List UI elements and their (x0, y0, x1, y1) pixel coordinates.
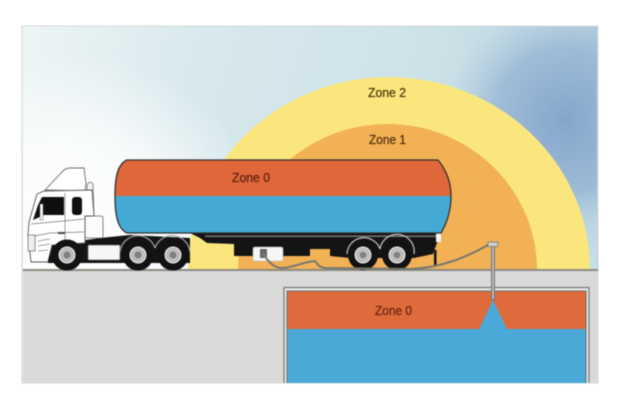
tanker: cylindrical tank (115, 160, 451, 233)
ground with surface line (23, 269, 598, 383)
vapour cone (479, 300, 507, 329)
pump unit (253, 247, 283, 261)
tractor wheels (48, 236, 190, 270)
trailer chassis (190, 232, 441, 266)
label: Zone 1: Zone 1 (369, 133, 406, 147)
fill pipe and coupling (488, 242, 498, 300)
zone 1 area: orange semicircle (238, 124, 537, 270)
zone 2 area: yellow semicircle (188, 77, 590, 270)
label: Zone 2: Zone 2 (368, 86, 406, 100)
tractor cab (28, 168, 94, 262)
label: Zone 0 in tanker: Zone 0 (232, 171, 270, 185)
tractor chassis (50, 216, 190, 263)
trailer wheels (347, 234, 414, 270)
delivery hose (263, 244, 490, 269)
underground tank (284, 288, 589, 383)
label: Zone 0 in underground tank: Zone 0 (375, 304, 412, 318)
